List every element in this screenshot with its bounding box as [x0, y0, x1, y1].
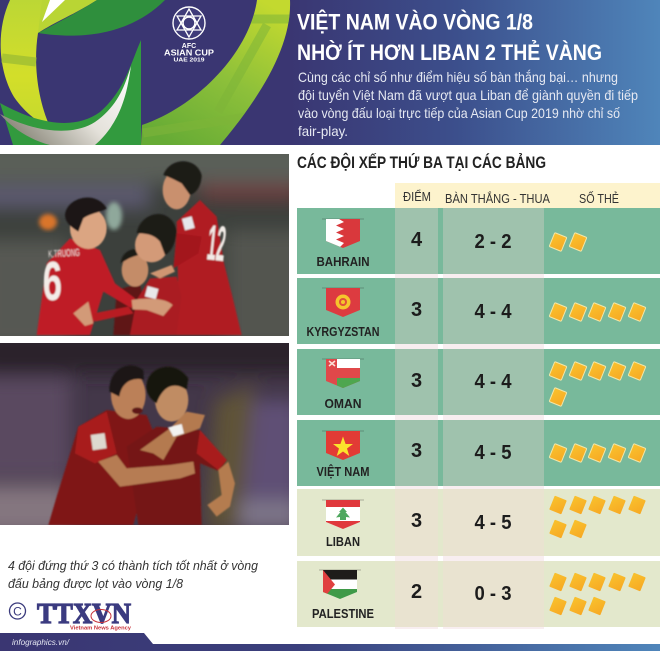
goals: Kyrgyzstan: 4 - 4 [474, 301, 512, 323]
row: Bahrain [297, 208, 660, 274]
row: Oman [297, 349, 660, 415]
points: Palestine: 2 [411, 581, 422, 603]
photo: players celebrating, top [0, 154, 289, 336]
arm [98, 455, 195, 487]
goals: Oman: 4 - 4 [474, 371, 512, 393]
table header [395, 183, 660, 208]
flag: Liban [322, 500, 364, 529]
table column strips [395, 208, 544, 629]
yellow cards: 5 [549, 444, 646, 462]
title: VIỆT NAM VÀO VÒNG 1/8 [297, 10, 533, 34]
goals: Bahrain: 2 - 2 [474, 231, 512, 253]
logo: AFC Asian Cup UAE 2019: AFC [182, 43, 196, 50]
row: Việt Nam [297, 420, 660, 486]
yellow cards: 2 [549, 233, 587, 251]
photo: players celebrating, top: K.TRUONG [48, 248, 80, 260]
points: Oman: 3 [411, 370, 422, 392]
photo: players celebrating, top: 12 [205, 215, 229, 272]
header artwork: green swooshes [0, 0, 295, 145]
yellow cards: 6 [549, 362, 646, 406]
flag: Việt Nam [322, 430, 364, 460]
centre player [130, 277, 182, 335]
name: Palestine: PALESTINE [312, 607, 374, 621]
logo: AFC Asian Cup UAE 2019 [164, 7, 214, 64]
right player [127, 427, 227, 525]
yellow cards: 5 [549, 303, 646, 321]
row: Palestine [297, 561, 660, 627]
table header: SỐ THẺ [579, 191, 619, 206]
points: Bahrain: 4 [411, 229, 423, 251]
yellow cards: 8 [549, 573, 646, 615]
points: Liban: 3 [411, 510, 422, 532]
name: Kyrgyzstan: KYRGYZSTAN [306, 325, 380, 339]
title [297, 10, 602, 65]
goals: Việt Nam: 4 - 5 [474, 442, 512, 464]
right player [175, 200, 242, 335]
TTXVN logo: Vietnam News Agency [70, 626, 132, 632]
points: Kyrgyzstan: 3 [411, 299, 422, 321]
goals: Palestine: 0 - 3 [474, 583, 512, 605]
row: Kyrgyzstan [297, 278, 660, 344]
left player [48, 410, 157, 525]
yellow cards: 7 [549, 496, 646, 538]
name: Liban: LIBAN [326, 535, 360, 549]
intro text: Cùng các chỉ số như điểm hiệu số bàn thắng bại… nhưng [298, 69, 618, 85]
intro text: vào vòng đấu loại trực tiếp của Asian Cup 2019 nhờ chỉ số [298, 105, 620, 121]
logo: AFC Asian Cup UAE 2019: UAE 2019 [174, 58, 205, 64]
flag: Palestine [319, 570, 361, 599]
intro text [298, 69, 638, 139]
TTXVN logo: TTXVN [37, 598, 131, 630]
header banner [0, 0, 660, 145]
section heading: CÁC ĐỘI XẾP THỨ BA TẠI CÁC BẢNG [297, 153, 546, 172]
flag: Bahrain [322, 218, 364, 248]
goals: Liban: 4 - 5 [474, 512, 512, 534]
points: Việt Nam: 3 [411, 440, 422, 462]
photo: players celebrating, top: 6 [43, 250, 62, 312]
copyright symbol [10, 603, 26, 619]
logo: AFC Asian Cup UAE 2019: ASIAN CUP [164, 48, 214, 58]
caption: đấu bảng được lọt vào vòng 1/8 [8, 576, 184, 591]
copyright symbol: C [13, 604, 22, 618]
footer url: infographics.vn/ [12, 637, 71, 647]
name: Việt Nam: VIỆT NAM [316, 464, 370, 479]
name: Bahrain: BAHRAIN [316, 255, 370, 269]
title: NHỜ ÍT HƠN LIBAN 2 THẺ VÀNG [297, 40, 602, 65]
flag: Oman [322, 358, 364, 388]
table header: BÀN THẮNG - THUA [445, 191, 551, 206]
row: Liban [297, 489, 660, 556]
intro text: fair-play. [298, 123, 348, 139]
name: Oman: OMAN [324, 397, 362, 411]
photo: players celebrating, bottom [0, 343, 289, 525]
caption [8, 558, 259, 591]
left player [37, 238, 135, 335]
footer bar [0, 633, 660, 651]
flag: Kyrgyzstan [322, 288, 364, 317]
table header: ĐIỂM [403, 189, 431, 204]
caption: 4 đội đứng thứ 3 có thành tích tốt nhất ở vòng [8, 558, 259, 573]
hidden player [113, 283, 150, 335]
